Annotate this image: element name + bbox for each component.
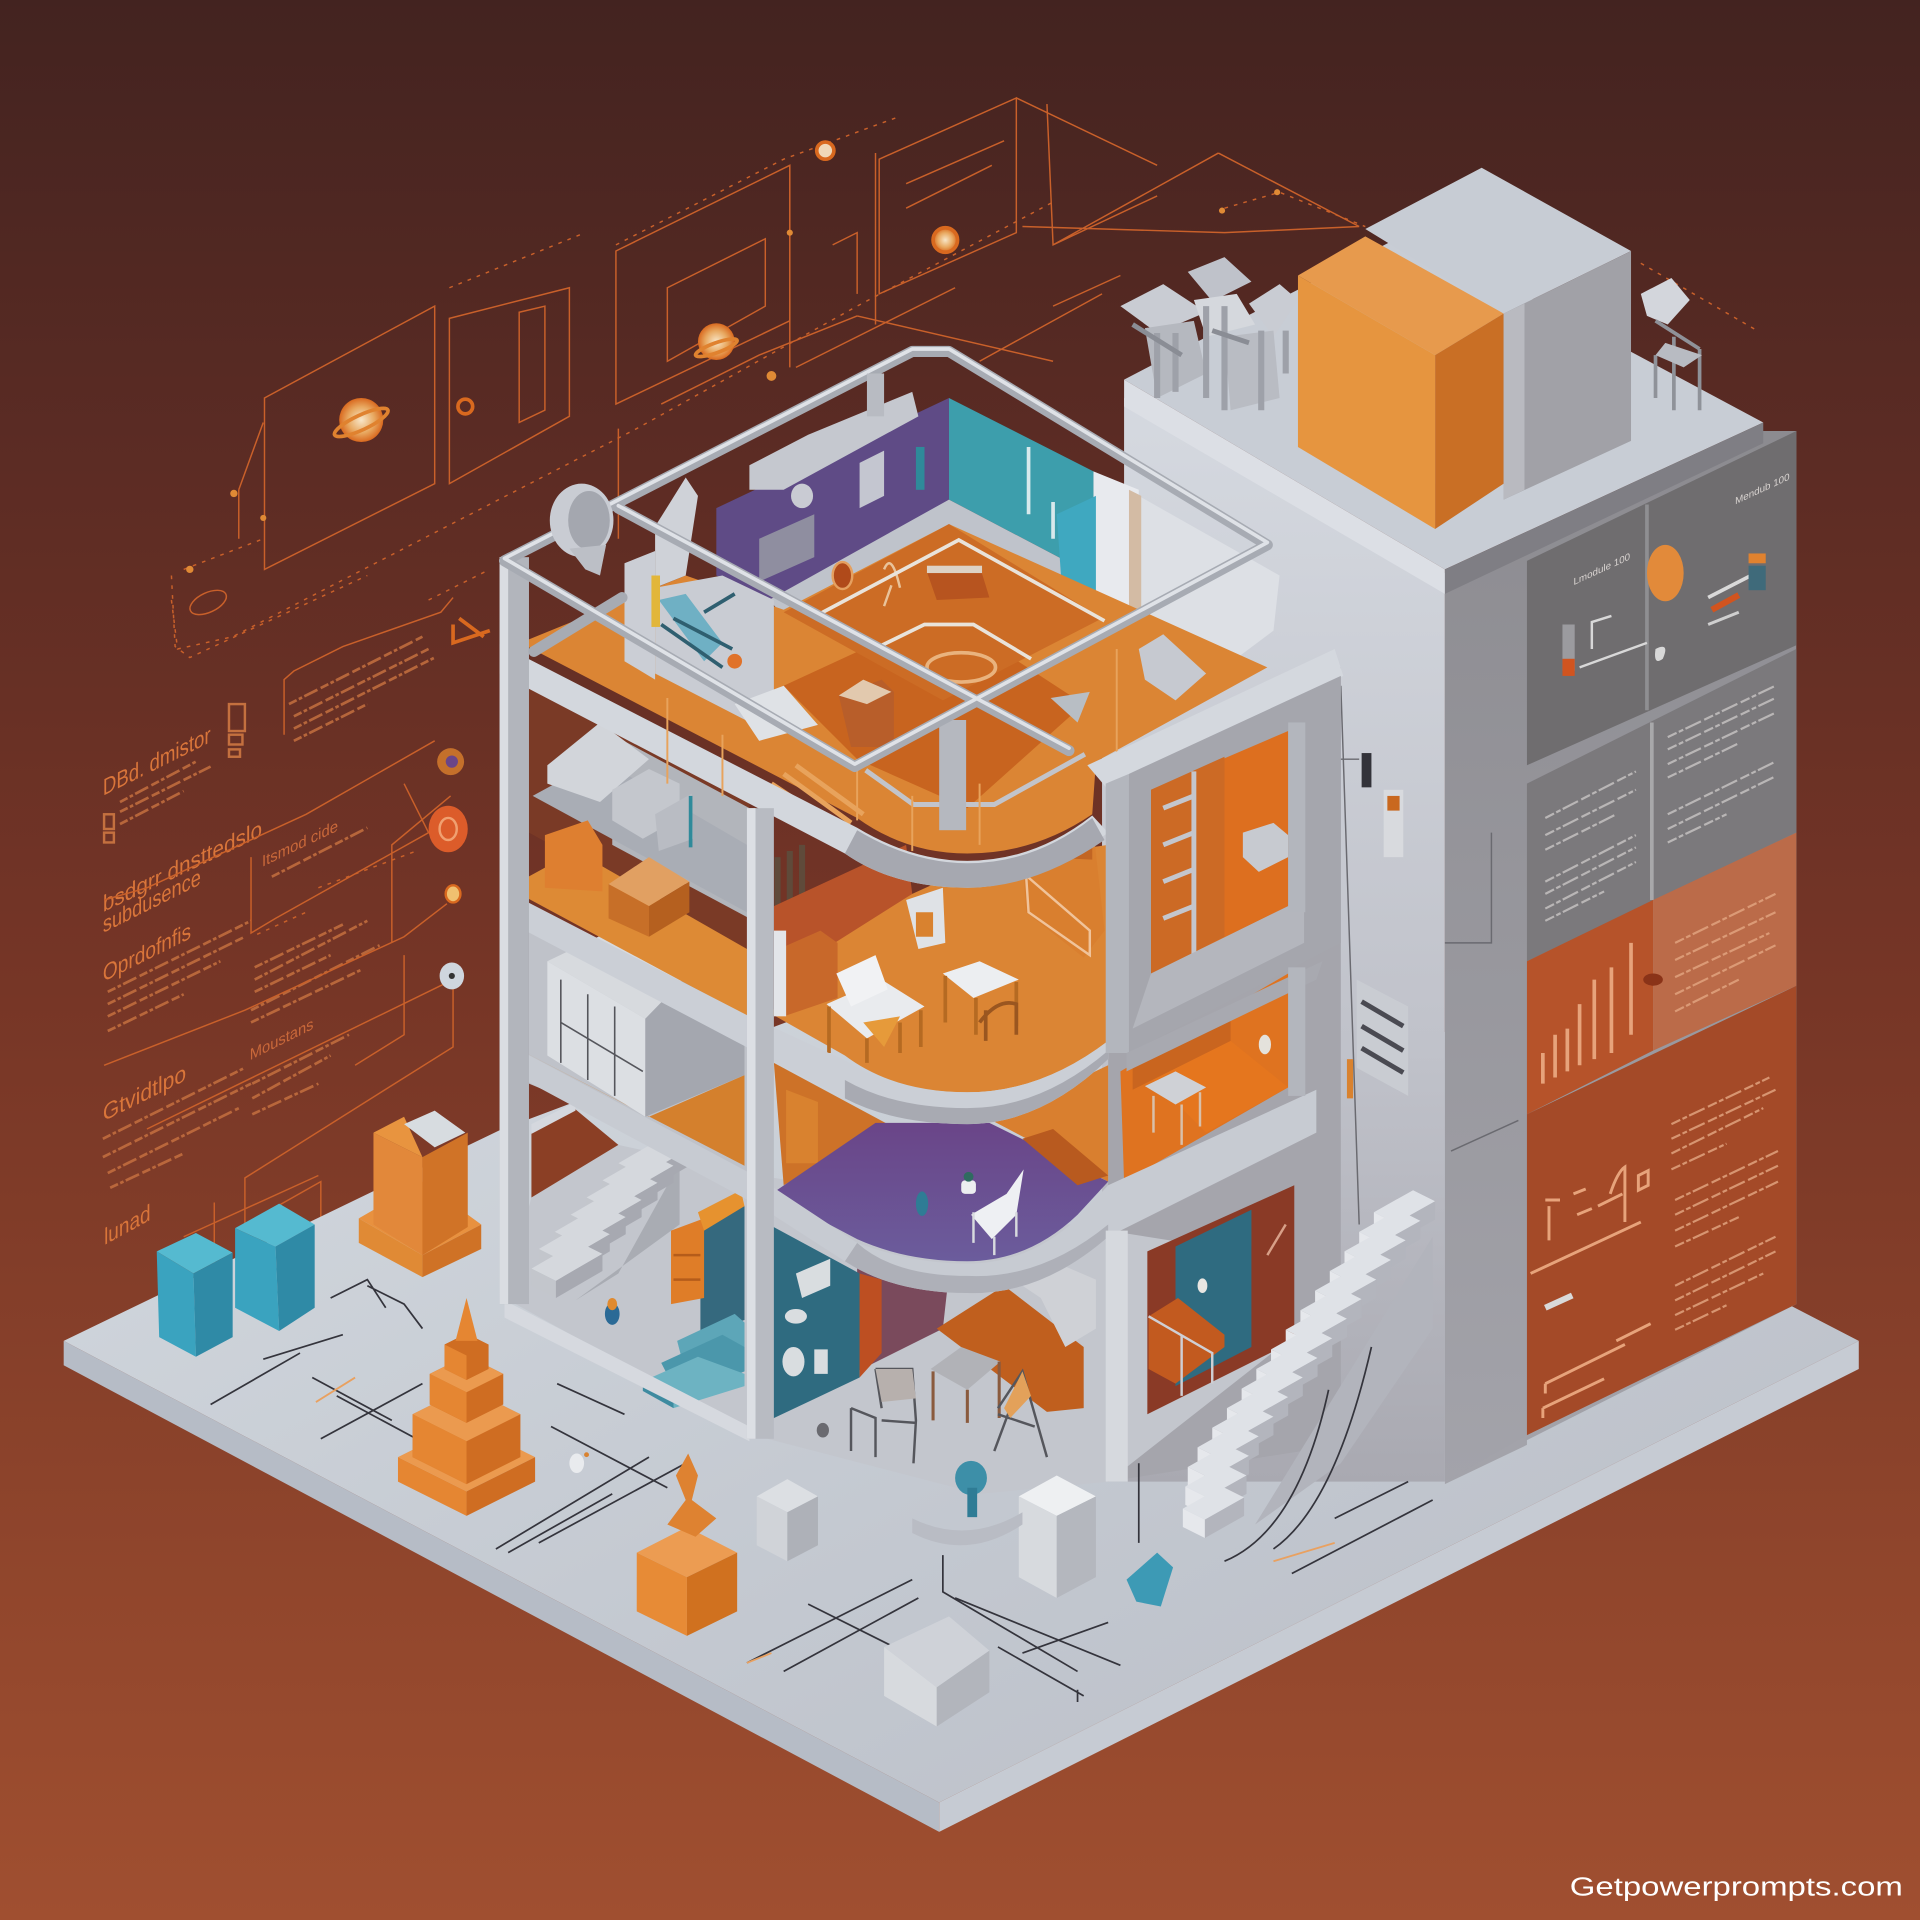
checklist icons <box>104 704 245 842</box>
roof edge right <box>1445 422 1763 594</box>
bay behind shelf <box>529 686 749 955</box>
teal wall <box>949 398 1093 576</box>
tower <box>1102 168 1796 1484</box>
tower base ledge <box>1445 1435 1527 1484</box>
node: small orange <box>446 885 460 902</box>
doorway orange shapes <box>1022 820 1104 958</box>
blueprint panel 2 <box>449 288 569 484</box>
window interior <box>1151 757 1288 973</box>
teal steps <box>643 1314 744 1408</box>
node: silver disc <box>440 962 464 989</box>
panel caption: Mendub 100 <box>1735 472 1790 507</box>
blueprint small icon: wire sphere <box>186 585 230 620</box>
orbit icon 4 <box>817 142 834 159</box>
fridge block <box>547 933 744 1117</box>
orange floor <box>520 524 1267 853</box>
figurine <box>667 1453 716 1537</box>
grey shelf floor <box>533 759 747 912</box>
small white bird <box>569 1452 589 1473</box>
holographic text panels, left <box>103 569 490 1286</box>
cap post centre <box>939 720 966 830</box>
level 3 <box>502 931 1316 1293</box>
bay background <box>529 931 749 1176</box>
slab under level 3 <box>502 1041 1316 1293</box>
orange nodes <box>186 189 1280 573</box>
window sill <box>1133 906 1304 1029</box>
window stool <box>1145 1071 1206 1145</box>
round stage <box>912 1512 1022 1545</box>
white box <box>1019 1476 1096 1598</box>
frame top beam <box>1087 649 1343 790</box>
frame left post <box>1106 774 1129 1053</box>
platform top <box>64 857 1859 1802</box>
appliance <box>906 888 945 949</box>
columns <box>500 557 1128 1482</box>
right block wall <box>1108 667 1341 1482</box>
shelf machines <box>547 722 693 851</box>
machine column <box>624 478 818 741</box>
node: swirl <box>437 748 464 775</box>
right block windows and frame <box>1087 649 1343 1096</box>
right white wall <box>1139 496 1280 667</box>
ground level <box>504 1102 1296 1494</box>
table <box>931 1347 1000 1423</box>
floor slats <box>771 765 863 833</box>
main room floor <box>771 845 1108 1092</box>
wall unit <box>1357 980 1408 1096</box>
tower panel 3: bars <box>1527 833 1796 1114</box>
blueprint panel 3 <box>616 165 790 404</box>
beam at rear <box>531 1102 576 1134</box>
fan unit <box>550 484 613 576</box>
cabinet <box>774 931 838 1016</box>
wall wiring and switches <box>1310 686 1518 1224</box>
left stair <box>531 1136 689 1300</box>
small figure on purple floor <box>916 1191 928 1216</box>
icon: device <box>1562 616 1647 676</box>
wall items <box>759 447 1053 582</box>
lower right window <box>1147 1185 1294 1414</box>
blueprint panel 1 <box>264 306 435 569</box>
platform wiring <box>211 1280 1433 1702</box>
heading text: Oprdofnfis <box>103 918 191 988</box>
purple wall <box>716 398 949 600</box>
heading text: bsdgrr dnsttedslo <box>103 816 262 918</box>
tower panel 1: diagram <box>1527 431 1796 765</box>
small figure <box>605 1298 620 1325</box>
white chair <box>971 1169 1024 1255</box>
upper window <box>1151 731 1288 973</box>
teal tall box <box>1057 496 1096 609</box>
level 1 <box>500 392 1280 888</box>
slab under level 2 <box>502 889 1108 1124</box>
tower right face <box>1445 431 1796 1482</box>
desk with computer <box>827 955 924 1063</box>
front curb <box>504 1300 749 1441</box>
icon: tool <box>1708 553 1766 624</box>
rooftop post <box>867 373 884 416</box>
tower left face <box>1102 398 1445 1482</box>
heading text: DBd. dmistor <box>103 722 211 802</box>
wall hanging shapes <box>782 1259 830 1376</box>
small cream cabinet <box>1004 1261 1096 1347</box>
machine teal coil <box>651 576 742 669</box>
tower panel 4: notes <box>1527 986 1796 1435</box>
orange stepped tower <box>398 1298 535 1516</box>
books rack <box>778 845 802 912</box>
orange floor left <box>508 851 747 1016</box>
heading text: subdusence <box>103 864 201 939</box>
floor objects <box>833 562 1206 747</box>
glyph cluster <box>453 618 490 643</box>
platform <box>64 857 1859 1832</box>
main room back wall <box>774 845 912 967</box>
panel caption: Lmodule 100 <box>1573 552 1630 588</box>
lower mullion <box>1288 967 1305 1096</box>
icon: clip <box>1655 647 1665 661</box>
right column <box>1106 1231 1128 1482</box>
heading text: lunad <box>104 1199 151 1251</box>
platform left side <box>64 1341 939 1832</box>
teal box 2 <box>235 1204 315 1331</box>
heading text: Gtvidtlpo <box>103 1060 186 1127</box>
level 2 <box>502 686 1108 1124</box>
orbit icon 1 <box>331 398 391 442</box>
orange pedestal <box>359 1111 481 1277</box>
lower beam <box>1127 961 1322 1071</box>
chairs <box>851 1369 1047 1463</box>
grill unit <box>884 1616 989 1727</box>
small body text lines <box>103 637 435 1188</box>
orbit icon 3 <box>933 228 958 252</box>
right orange room <box>992 973 1288 1182</box>
orange wall strip <box>860 1273 882 1378</box>
gourd icon <box>1647 545 1684 601</box>
small items <box>817 1423 829 1438</box>
subheading text: Moustans <box>250 1014 313 1064</box>
darker floor area <box>784 612 1084 808</box>
tower panel 2: text <box>1527 649 1796 961</box>
back plum wall <box>857 1261 949 1371</box>
rooftop equipment left <box>1120 257 1298 410</box>
white partition <box>1093 471 1141 624</box>
orange floor <box>514 1047 744 1166</box>
small grey box <box>757 1479 818 1561</box>
stair fragment on purple floor edge <box>1022 1129 1108 1185</box>
upper back grey counters <box>749 392 918 490</box>
teal box 1 <box>157 1233 233 1357</box>
rooftop chair right <box>1641 278 1702 410</box>
left column <box>500 557 529 1304</box>
node: red disc <box>429 806 468 852</box>
roof slab <box>1124 233 1763 569</box>
subheading text: Itsmod cide <box>262 816 338 871</box>
centre column <box>747 808 774 1439</box>
teal vacuum <box>955 1461 987 1517</box>
roof frame tubes <box>504 349 1267 767</box>
orange cabinet <box>671 1190 744 1304</box>
main structure <box>500 349 1343 1494</box>
right stair <box>1183 1190 1435 1538</box>
roof edge left <box>1124 380 1445 594</box>
watermark: Getpowerprompts.com <box>1570 1874 1903 1902</box>
holographic blueprint lines, upper left <box>171 98 1757 649</box>
upper window frame <box>1129 676 1341 1053</box>
orange rooftop box <box>1298 236 1504 529</box>
plant pot <box>961 1172 976 1194</box>
wooden desk <box>609 857 689 937</box>
thin hangers <box>667 649 1117 851</box>
railings on floor <box>820 540 1104 804</box>
dark teal centre wall <box>769 1224 860 1420</box>
blueprint panel 4 <box>879 98 1016 294</box>
teal tool <box>1127 1553 1173 1607</box>
grey rooftop box <box>1365 168 1631 500</box>
small orange node <box>458 399 473 414</box>
orbit icon 2 <box>694 323 739 360</box>
platform right side <box>939 1341 1859 1832</box>
ground floor <box>504 1145 1296 1494</box>
purple floor <box>771 1123 1108 1261</box>
platform objects <box>157 1111 1173 1727</box>
opening behind stair <box>531 1109 618 1198</box>
dark teal left wall <box>700 1206 744 1335</box>
mullion <box>1288 722 1305 912</box>
orange room centre <box>774 1063 888 1185</box>
orange tall box <box>637 1453 737 1636</box>
orange box <box>545 820 602 891</box>
orange tent wall <box>937 1286 1084 1412</box>
grey wall base <box>769 500 1093 616</box>
table and chair <box>943 961 1019 1041</box>
slab under level 1 <box>500 644 1108 888</box>
